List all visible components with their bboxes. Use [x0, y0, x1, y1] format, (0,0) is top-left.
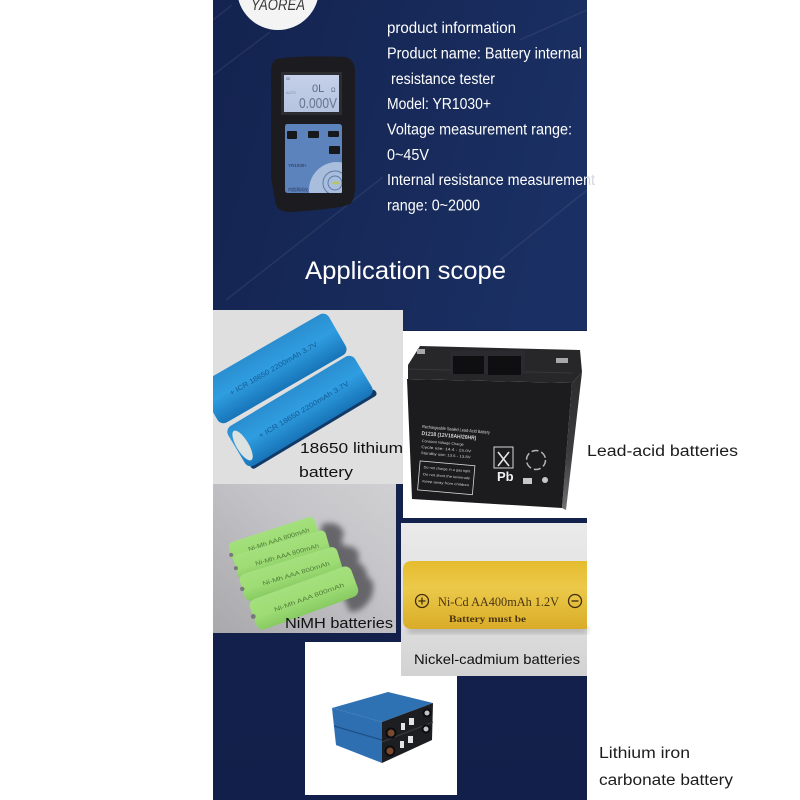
panel: nickel-cadmium battery photo: [401, 523, 587, 676]
battery cell: back: [213, 314, 347, 424]
text block: product information: resistance tester: [391, 71, 495, 88]
device screen: AUTO: [286, 91, 296, 95]
label: 18650 lithium battery: [299, 441, 403, 481]
cell markings: Ni-Cd AA400mAh 1.2V: [438, 594, 560, 609]
green cell 3: [236, 546, 344, 603]
heading: application scope: Application scope: [305, 257, 506, 285]
lead-acid label print: Keep away from children: [422, 479, 469, 487]
text block: product information: 0~45V: [387, 147, 430, 164]
device control panel: [285, 124, 342, 193]
green cell 3: Ni-Mh AAA 800mAh: [262, 561, 331, 588]
text block: product information: product information: [387, 20, 516, 37]
green cell 1: Ni-Mh AAA 800mAh: [248, 528, 310, 553]
green cell 4: Ni-Mh AAA 800mAh: [274, 583, 345, 614]
green cell 1: [228, 517, 318, 564]
text block: product information: Model: YR1030+: [387, 96, 491, 113]
label: lithium iron carbonate battery: carbonate battery: [599, 772, 733, 789]
label: lithium iron carbonate battery: Lithium iron: [599, 745, 690, 762]
label: lead-acid batteries: Lead-acid batteries: [587, 443, 738, 460]
battery terminals: [386, 710, 430, 756]
panel: lead-acid battery photo: [403, 331, 587, 518]
lead-acid label print: Standby use: 13.5 - 13.8V: [421, 451, 472, 459]
device control panel: YR1030+: [288, 163, 307, 168]
label: nickel-cadmium batteries: Nickel-cadmium batteries: [414, 651, 580, 667]
device screen: 0L: [312, 83, 324, 95]
label: 18650 lithium battery: battery: [299, 465, 354, 481]
device screen: 88: [286, 77, 290, 81]
label: 18650 lithium battery: 18650 lithium: [300, 441, 403, 457]
lead-acid label print: Do not short the terminals: [423, 472, 470, 480]
text block: product information: Voltage measurement range:: [387, 122, 572, 138]
lead-acid label print: Constant Voltage Charge: [422, 439, 464, 447]
green cell 2: [234, 530, 330, 578]
device screen: 0.000V: [299, 95, 337, 112]
lead-acid label print: Rechargeable Sealed Lead-Acid Battery: [422, 424, 491, 435]
panel: lithium iron carbonate battery photo: [305, 642, 457, 795]
lead-acid label print: [417, 424, 491, 496]
cell markings: [416, 594, 582, 624]
device screen: Ω: [331, 88, 336, 94]
lead-acid label print: Do not charge in a gas tight: [423, 465, 471, 473]
text block: product information: Product name: Battery internal: [387, 46, 582, 62]
panel: navy background: [213, 0, 587, 800]
label: lithium iron carbonate battery: [599, 745, 733, 789]
battery cell: back: + ICR 18650 2200mAh 3.7V: [229, 341, 319, 397]
device control panel: 内阻测试仪: [288, 186, 308, 192]
icon: recycling bin and Pb mark: [494, 447, 548, 484]
icon: recycling bin and Pb mark: Pb: [497, 469, 514, 484]
panel: 18650 lithium battery photo: [197, 310, 403, 484]
text block: product information: Internal resistance measurement: [387, 172, 596, 189]
battery cell: front: + ICR 18650 2200mAh 3.7V: [258, 380, 351, 440]
battery cell: front: [225, 353, 378, 471]
device screen: [281, 72, 342, 115]
infographic canvas: [213, 0, 738, 800]
lead-acid label print: D1218 (12V18AH/20HR): [421, 431, 477, 442]
label: NiMH batteries: NiMH batteries: [285, 615, 393, 632]
green cell 4: [250, 566, 358, 630]
lead-acid label print: Cycle use: 14.4 - 15.0V: [421, 445, 472, 453]
text block: product information: [387, 20, 596, 214]
logo badge: [237, 0, 319, 30]
cell markings: Battery must be: [449, 614, 526, 624]
text block: product information: range: 0~2000: [387, 198, 480, 214]
icon: battery tester device: [271, 56, 356, 212]
green cell 2: Ni-Mh AAA 800mAh: [255, 544, 320, 568]
panel: NiMH battery photo: [213, 484, 396, 633]
